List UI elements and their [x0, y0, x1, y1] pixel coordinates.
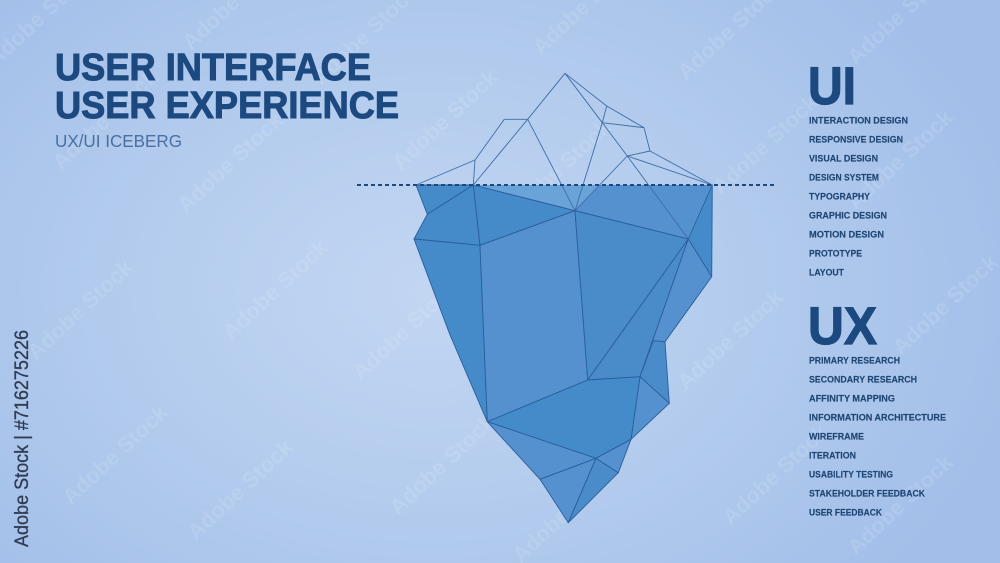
list: UI topics: DESIGN SYSTEM [809, 172, 879, 183]
iceberg above-water outline [416, 73, 712, 239]
watermarks: Adobe Stock [717, 419, 833, 530]
watermarks: Adobe Stock [672, 284, 788, 395]
list: UX topics: PRIMARY RESEARCH [809, 355, 900, 366]
list: UX topics [809, 355, 947, 518]
title: USER EXPERIENCE [55, 85, 399, 127]
list: UX topics: AFFINITY MAPPING [809, 393, 895, 404]
list: UI topics: VISUAL DESIGN [809, 153, 878, 164]
watermarks: Adobe Stock [387, 64, 503, 175]
watermarks: Adobe Stock [47, 64, 163, 175]
list: UX topics: SECONDARY RESEARCH [809, 374, 917, 385]
watermarks: Adobe Stock [57, 399, 173, 510]
list: UI topics: PROTOTYPE [809, 248, 863, 259]
subtitle: UX/UI ICEBERG [55, 131, 182, 151]
watermarks: Adobe Stock [182, 434, 298, 545]
watermarks: Adobe Stock [172, 107, 288, 218]
watermarks: Adobe Stock [384, 409, 500, 520]
list: UX topics: USER FEEDBACK [809, 507, 882, 518]
list: UI topics: GRAPHIC DESIGN [809, 210, 887, 221]
heading: UI: UI [808, 57, 856, 116]
title [55, 47, 399, 127]
list: UX topics: USABILITY TESTING [809, 469, 893, 480]
iceberg underwater faces [414, 185, 712, 523]
watermarks: Adobe Stock [347, 274, 463, 385]
iceberg [414, 73, 712, 523]
watermarks: Adobe Stock [707, 89, 823, 200]
list: UI topics: LAYOUT [809, 267, 844, 278]
watermarks: Adobe Stock [842, 104, 958, 215]
list: UX topics: WIREFRAME [809, 431, 865, 442]
stock id: Adobe Stock | #716275226 [12, 330, 33, 547]
list: UI topics [809, 115, 908, 278]
list: UI topics: MOTION DESIGN [809, 229, 884, 240]
watermarks: Adobe Stock [22, 254, 138, 365]
watermarks: Adobe Stock [887, 249, 1000, 360]
list: UX topics: STAKEHOLDER FEEDBACK [809, 488, 925, 499]
title: USER INTERFACE [55, 47, 371, 89]
list: UX topics: ITERATION [809, 450, 856, 461]
watermarks: Adobe Stock [217, 234, 333, 345]
list: UI topics: TYPOGRAPHY [809, 191, 871, 202]
list: UI topics: RESPONSIVE DESIGN [809, 134, 903, 145]
waterline [357, 184, 775, 186]
watermarks: Adobe Stock [842, 449, 958, 560]
list: UX topics: INFORMATION ARCHITECTURE [809, 412, 947, 423]
list: UI topics: INTERACTION DESIGN [809, 115, 908, 126]
watermarks: Adobe Stock [500, 114, 616, 225]
heading: UX: UX [808, 297, 877, 356]
